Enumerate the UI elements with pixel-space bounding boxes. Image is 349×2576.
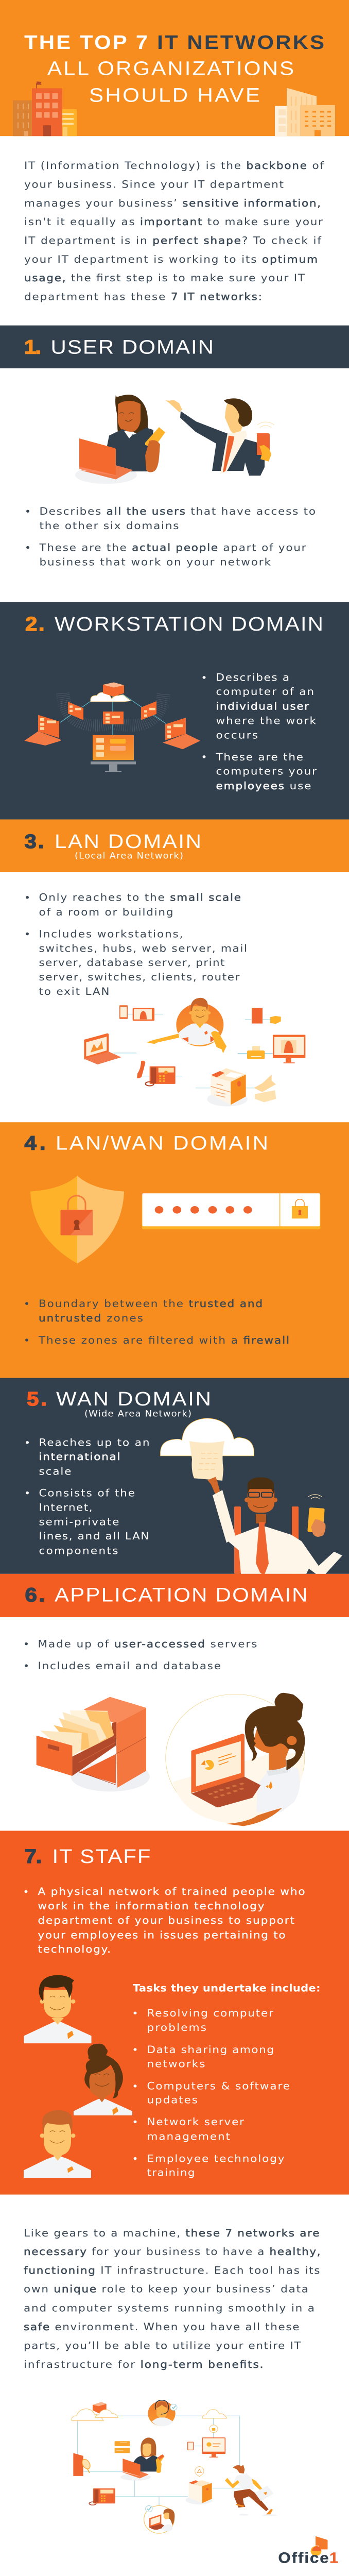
icon: security shield with padlock [30, 1176, 124, 1263]
text block: conclusion: Like gears to a machine, these 7 networks are [24, 2227, 320, 2239]
heading: IT staff: IT STAFF [53, 1845, 150, 1868]
bullets: WAN domain: semi-private [39, 1516, 119, 1528]
bullets: application domain: Includes email and database [38, 1660, 221, 1672]
text block: introduction: usage, the first step is to make sure your IT [24, 272, 305, 284]
bullets: workstation domain: computer of an [216, 686, 314, 698]
panel: 1 user domain heading: USER DOMAIN [51, 336, 214, 358]
list: tasks they undertake [134, 2007, 290, 2178]
bullets: workstation domain: Describes a [216, 672, 289, 684]
title: ALL ORGANIZATIONS [47, 57, 294, 79]
bullets: user domain [26, 505, 316, 568]
bullets: user domain: These are the actual people apart of your [39, 541, 306, 553]
text block: introduction: manages your business’ sensitive information, [24, 197, 321, 209]
list: tasks they undertake: networks [147, 2058, 205, 2070]
bullets: LAN domain: server, database server, print [39, 957, 225, 969]
panel: 1 user domain heading [0, 326, 349, 368]
text block: introduction: your business. Since your IT department [24, 179, 284, 190]
panel: 6 application domain heading: APPLICATION DOMAIN [55, 1584, 308, 1606]
bullets: user domain: business that work on your network [40, 556, 271, 568]
text block: introduction: department has these 7 IT networks: [24, 291, 262, 302]
bullets: application domain: Made up of user-accessed servers [38, 1638, 257, 1650]
panel: 3 LAN domain heading: 3. [25, 831, 44, 853]
bullets: workstation domain: individual user [216, 700, 309, 712]
illustration: connected computers and cloud [24, 682, 200, 772]
logo: Office1 [278, 2536, 338, 2566]
bullets: user domain: the other six domains [40, 520, 179, 532]
heading: LAN/WAN domain: LAN/WAN DOMAIN [56, 1132, 268, 1154]
bullets: workstation domain [203, 672, 317, 792]
panel: 6 application domain heading [0, 1574, 349, 1617]
list: tasks they undertake: Employee technology [147, 2153, 285, 2164]
bullet: definition of IT staff: technology. [38, 1943, 111, 1955]
bullets: WAN domain [26, 1437, 150, 1556]
bullets: LAN domain: server, switches, clients, router [39, 971, 240, 983]
bullets: LAN/WAN domain: Boundary between the trusted and [39, 1298, 263, 1310]
bullets: LAN/WAN domain [25, 1298, 289, 1346]
heading: IT staff: 7. [25, 1845, 42, 1868]
bullet: definition of IT staff: department of your business to support [38, 1914, 294, 1926]
list: tasks they undertake: Network server [147, 2116, 245, 2128]
bullets: workstation domain: These are the [215, 751, 303, 763]
panel: 3 LAN domain heading: (Local Area Network) [75, 851, 183, 861]
text block: conclusion: infrastructure for long-term benefits. [24, 2359, 264, 2370]
title [24, 31, 324, 106]
illustration: connected IT network diagram [72, 2400, 277, 2533]
bullet: definition of IT staff: A physical network of trained people who [38, 1886, 305, 1897]
illustration: woman using laptop in circle [166, 1693, 305, 1826]
text block: introduction [24, 160, 324, 302]
bullets: WAN domain: Reaches up to an [39, 1437, 150, 1448]
heading: WAN domain [27, 1388, 211, 1419]
panel: 2 workstation domain [0, 602, 349, 819]
heading: workstation domain: 2. [25, 613, 44, 635]
list: tasks they undertake: Data sharing among [147, 2044, 274, 2056]
heading: WAN domain: (Wide Area Network) [84, 1409, 191, 1419]
illustration: woman with laptop and businessman [75, 395, 274, 484]
title: SHOULD HAVE [89, 84, 260, 106]
icon: city buildings right [275, 88, 335, 136]
bullets: WAN domain: lines, and all LAN [39, 1530, 149, 1542]
panel: 6 application domain heading: 6. [25, 1584, 45, 1606]
list: tasks they undertake: problems [147, 2022, 206, 2033]
portrait: female staff member [74, 2044, 132, 2115]
bullets: workstation domain: employees use [216, 780, 311, 792]
heading: WAN domain: 5. [27, 1388, 47, 1410]
bullets: WAN domain: international [39, 1451, 120, 1463]
heading: WAN domain: WAN DOMAIN [56, 1388, 211, 1410]
bullets: WAN domain: scale [39, 1465, 71, 1477]
text block: conclusion [24, 2227, 320, 2370]
text block: introduction: isn't it equally as important to make sure your [24, 216, 323, 228]
bullet: definition of IT staff: your employees in issues pertaining to [38, 1929, 286, 1941]
bullets: LAN domain: switches, hubs, web server, mail [39, 942, 247, 954]
bullets: application domain [25, 1638, 257, 1672]
bullets: WAN domain: components [39, 1545, 118, 1556]
text block: conclusion: necessary for your business to have a healthy, [24, 2246, 320, 2258]
illustration: LAN technician and devices [84, 998, 305, 1106]
bullets: WAN domain: Internet, [39, 1501, 93, 1513]
portrait: male staff member two [24, 2110, 91, 2178]
bullets: LAN domain: to exit LAN [39, 986, 110, 997]
text block: conclusion: parts, you’ll be able to utilize your entire IT [24, 2340, 301, 2351]
panel: 1 user domain heading: 1. [24, 336, 41, 358]
logo: Office1: Office [278, 2550, 328, 2566]
text block: introduction: IT (Information Technology) is the backbone of [24, 160, 324, 172]
logo: Office1: 1 [329, 2550, 338, 2566]
panel: header banner [0, 0, 349, 136]
text block: conclusion: own unique role to keep your business’ data [24, 2283, 308, 2295]
list: tasks they undertake: Resolving computer [147, 2007, 274, 2019]
bullets: LAN/WAN domain: These zones are filtered with a firewall [38, 1334, 289, 1346]
bullets: workstation domain: where the work [216, 715, 316, 726]
heading: LAN/WAN domain: 4. [25, 1132, 45, 1154]
text block: conclusion: safe environment. When you have all these [24, 2321, 300, 2333]
panel: 3 LAN domain heading [0, 819, 349, 872]
list: tasks they undertake: management [147, 2130, 230, 2142]
bullets: LAN domain: of a room or building [39, 906, 173, 918]
icon: password field [142, 1193, 320, 1229]
list: tasks they undertake: updates [147, 2094, 198, 2106]
icon: city buildings left [13, 81, 77, 136]
illustration: filing cabinet [37, 1697, 150, 1791]
bullets: LAN domain: Only reaches to the small scale [39, 892, 241, 903]
bullets: LAN domain [26, 892, 247, 997]
heading: tasks: Tasks they undertake include: [133, 1982, 321, 1994]
text block: introduction: your IT department is working to its optimum [24, 253, 318, 265]
list: tasks they undertake: training [147, 2166, 195, 2178]
bullet: definition of IT staff: work in the information technology [38, 1900, 264, 1912]
panel: 3 LAN domain heading: LAN DOMAIN [55, 831, 201, 853]
bullets: workstation domain: occurs [216, 729, 258, 741]
portrait: male staff member [24, 1975, 92, 2043]
panel: 5 WAN domain [0, 1378, 349, 1578]
text block: conclusion: and computer systems running smoothly in a [24, 2302, 315, 2314]
list: tasks they undertake: Computers & software [147, 2080, 290, 2092]
bullets: LAN domain: Includes workstations, [39, 928, 183, 940]
bullets: LAN/WAN domain: untrusted zones [39, 1312, 143, 1324]
text block: introduction: IT department is in perfect shape? To check if [24, 234, 322, 246]
title: THE TOP 7 IT NETWORKS [24, 31, 324, 54]
bullets: WAN domain: Consists of the [39, 1487, 135, 1499]
text block: conclusion: functioning IT infrastructure. Each tool has its [24, 2264, 320, 2276]
heading: workstation domain: WORKSTATION DOMAIN [55, 613, 323, 635]
bullets: user domain: Describes all the users that have access to [40, 505, 316, 517]
illustration: man uploading document to cloud [161, 1418, 342, 1578]
panel: 7 IT staff [0, 1831, 349, 2195]
bullets: workstation domain: computers your [216, 766, 317, 777]
bullet: definition of IT staff [25, 1886, 305, 1955]
panel: 4 LAN/WAN domain [0, 1122, 349, 1378]
